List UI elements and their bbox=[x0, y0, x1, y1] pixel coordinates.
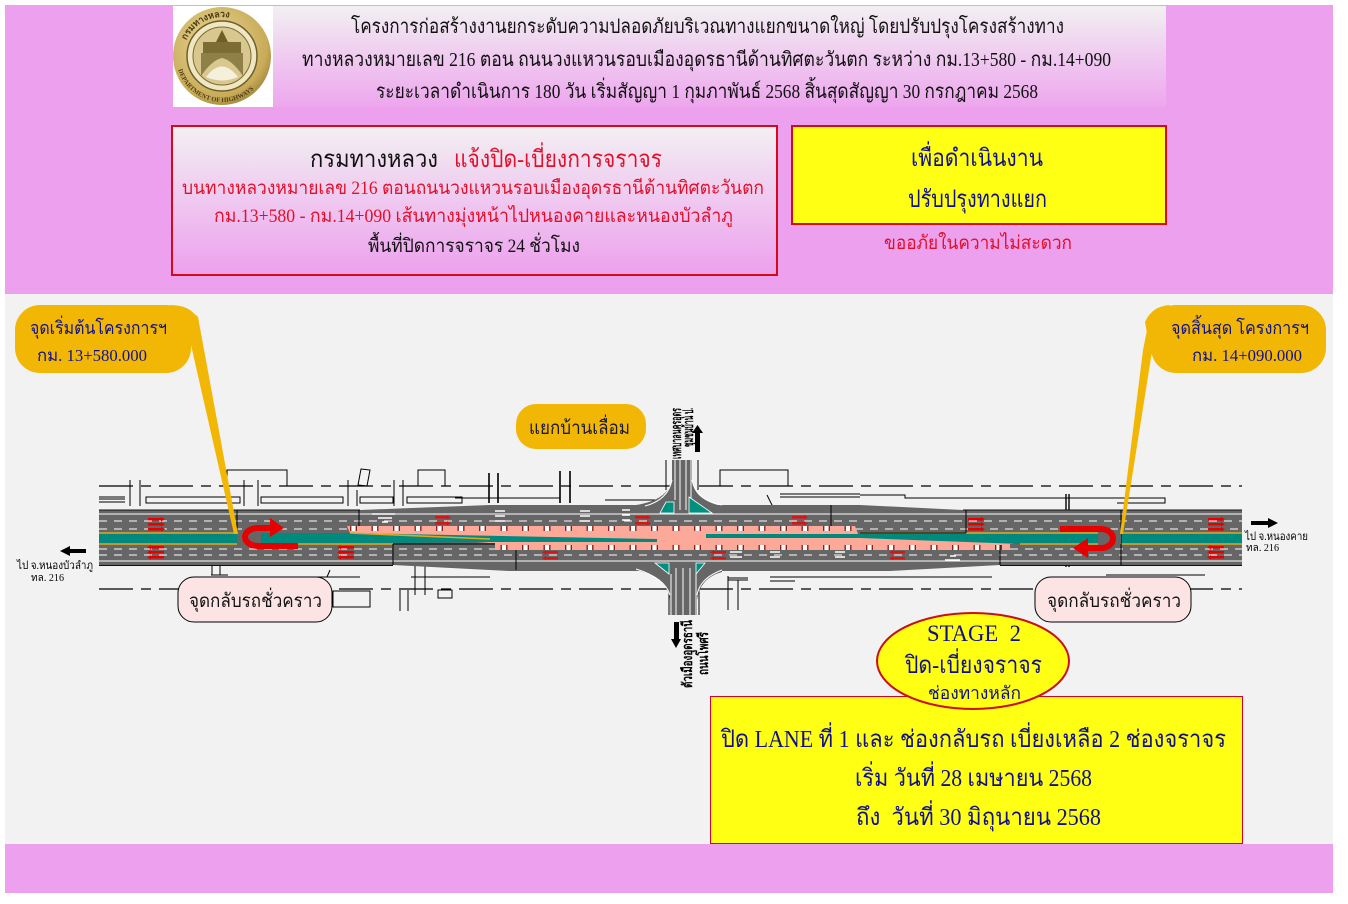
text: highway section: บนทางหลวงหมายเลข 216 ตอนถนนวงแหวนรอบเมืองอุดรธานีด้านทิศตะวันตก bbox=[182, 177, 764, 200]
icon: department of highways seal: กรมทางหลวง bbox=[182, 12, 230, 40]
text: south road label line 2: ถนนโพศรี bbox=[694, 632, 712, 675]
road edge lines bbox=[99, 510, 1242, 566]
panel: bottom pink band bbox=[5, 844, 1333, 893]
label: temporary u-turn right: จุดกลับรถชั่วคราว bbox=[1047, 587, 1181, 613]
panel: stage schedule bbox=[710, 696, 1242, 844]
callout: project end bbox=[1120, 305, 1326, 534]
text: start label: จุดเริ่มต้นโครงการฯ bbox=[30, 315, 167, 339]
structure joints bbox=[237, 505, 1121, 570]
text: stage number: STAGE 2 bbox=[927, 621, 1021, 646]
icon: department of highways seal bbox=[173, 6, 273, 107]
roadside lines and buildings bbox=[99, 460, 1242, 615]
label: Ban Lueam junction: แยกบ้านเลื่อม bbox=[529, 414, 630, 439]
label: temporary u-turn left bbox=[178, 577, 332, 622]
panel: top pink band bbox=[5, 5, 1333, 294]
panel: diagram background bbox=[5, 294, 1333, 844]
arrow: to Nong Khai bbox=[1251, 518, 1278, 528]
text: north road label line 1: เทศบาลนครอุดร bbox=[670, 408, 685, 459]
text: start chainage: กม. 13+580.000 bbox=[37, 346, 147, 365]
text: project title line 1: โครงการก่อสร้างงานยกระดับความปลอดภัยบริเวณทางแยกขนาดใหญ่ โดยปรับปรุงโครงสร้างทาง bbox=[351, 15, 1064, 39]
text: purpose line 1: เพื่อดำเนินงาน bbox=[911, 141, 1043, 172]
icon: department of highways seal: DEPARTMENT OF HIGHWAYS bbox=[178, 68, 254, 102]
text: destination east: ไป จ.หนองคาย bbox=[1244, 530, 1308, 543]
text: start date: เริ่ม วันที่ 28 เมษายน 2568 bbox=[855, 761, 1092, 792]
text: highway number east: ทล. 216 bbox=[1246, 543, 1279, 554]
text: kilometre range and direction: กม.13+580 - กม.14+090 เส้นทางมุ่งหน้าไปหนองคายและหนองบัวลำภู bbox=[214, 205, 733, 228]
pink closed lane area bbox=[347, 526, 1098, 550]
red u-turn arrow left bbox=[238, 518, 298, 546]
median left bbox=[99, 533, 657, 544]
median right bbox=[706, 533, 1242, 544]
text: end chainage: กม. 14+090.000 bbox=[1192, 346, 1302, 365]
median edge lines bbox=[99, 533, 1242, 544]
panel: project header bbox=[173, 6, 1166, 107]
panel: purpose bbox=[792, 126, 1166, 224]
text: purpose line 2: ปรับปรุงทางแยก bbox=[908, 187, 1047, 214]
traffic islands bbox=[655, 497, 712, 574]
crossroad markings bbox=[671, 460, 696, 615]
text: highway number west: ทล. 216 bbox=[31, 573, 64, 584]
text: ชุมชนบ้าน ป. bbox=[681, 408, 697, 447]
panel: closure notice bbox=[172, 126, 777, 275]
text: project duration: ระยะเวลาดำเนินการ 180 วัน เริ่มสัญญา 1 กุมภาพันธ์ 2568 สิ้นสุดสัญญา 30 กรกฎาคม 2568 bbox=[376, 77, 1038, 104]
callout: project start bbox=[15, 305, 238, 534]
red lane arrows eastbound bbox=[148, 515, 1225, 532]
heading: closure and diversion: แจ้งปิด-เบี่ยงการจราจร bbox=[454, 142, 662, 173]
text: main lanes: ช่องทางหลัก bbox=[928, 683, 1021, 703]
zebra patches bbox=[372, 510, 960, 560]
label: temporary u-turn left: จุดกลับรถชั่วคราว bbox=[189, 587, 322, 613]
red u-turn arrow right bbox=[1060, 529, 1121, 558]
arrow: to south bbox=[671, 622, 681, 648]
label: Ban Lueam junction bbox=[516, 404, 646, 449]
text: end label: จุดสิ้นสุด โครงการฯ bbox=[1171, 315, 1309, 339]
badge: stage 2 bbox=[877, 613, 1069, 709]
road plan diagram bbox=[16, 408, 1308, 688]
cross road north and south bbox=[636, 460, 722, 615]
main road carriageway bbox=[99, 505, 1242, 571]
text: project title line 2: ทางหลวงหมายเลข 216 ตอน ถนนวงแหวนรอบเมืองอุดรธานีด้านทิศตะวันตก ระหว่าง กม.13+580 - กม.14+090 bbox=[302, 49, 1111, 72]
text: end date: ถึง วันที่ 30 มิถุนายน 2568 bbox=[856, 800, 1101, 832]
red lane arrows westbound bbox=[147, 545, 1224, 560]
label: temporary u-turn right bbox=[1035, 577, 1191, 622]
arrow: to north bbox=[692, 425, 703, 452]
lane lines bbox=[99, 514, 1242, 561]
heading: department notice: กรมทางหลวง bbox=[310, 147, 438, 173]
text: lanes closed: ปิด LANE ที่ 1 และ ช่องกลับรถ เบี่ยงเหลือ 2 ช่องจราจร bbox=[720, 722, 1226, 753]
text: destination west: ไป จ.หนองบัวลำภู bbox=[16, 559, 93, 572]
text: apology: ขออภัยในความไม่สะดวก bbox=[884, 232, 1072, 254]
arrow: to Nong Bua Lamphu bbox=[60, 546, 86, 556]
lane closure ticks bbox=[350, 526, 1010, 550]
text: closure hours: พื้นที่ปิดการจราจร 24 ชั่วโมง bbox=[368, 232, 580, 257]
text: closure diversion: ปิด-เบี่ยงจราจร bbox=[904, 648, 1042, 679]
text: south road label line 1: ตัวเมืองอุดรธานี bbox=[680, 620, 696, 688]
